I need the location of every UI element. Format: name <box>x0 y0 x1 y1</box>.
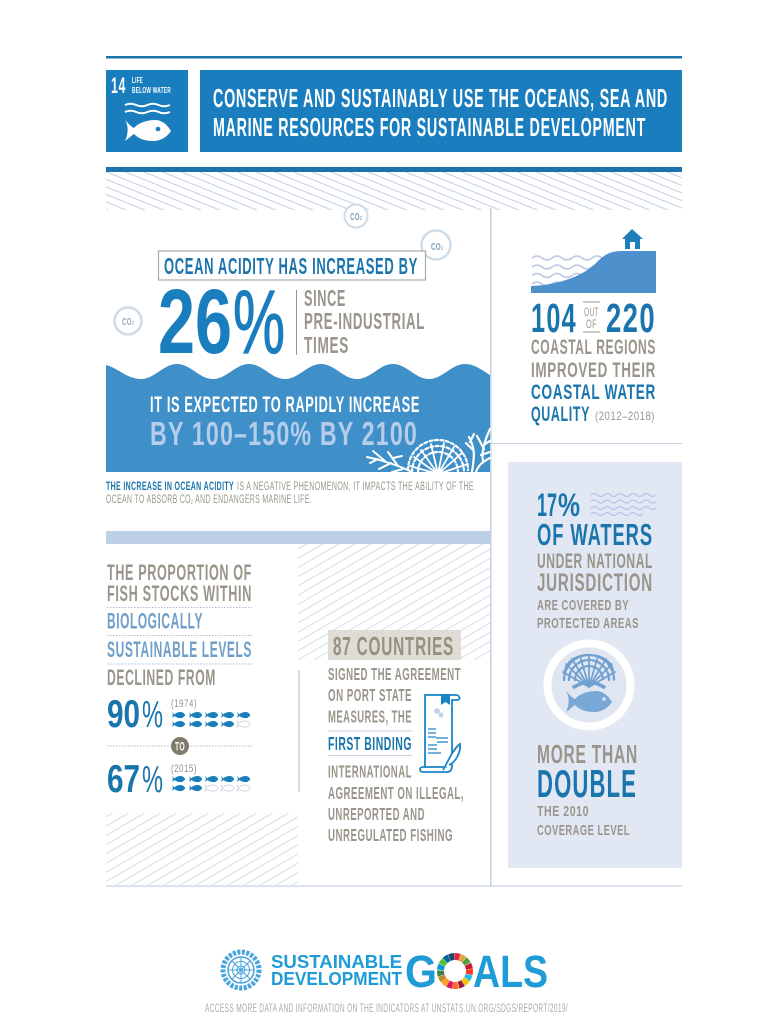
wave panel: IT IS EXPECTED TO RAPIDLY INCREASE <box>150 392 420 417</box>
26 percent stat: % <box>233 273 285 373</box>
more than double text: COVERAGE LEVEL <box>537 822 630 839</box>
coastal regions text: (2012–2018) <box>595 409 655 423</box>
protected waters text: PROTECTED AREAS <box>537 615 639 632</box>
fish stocks text: BIOLOGICALLY <box>107 608 203 634</box>
acidity explanation text: 2 <box>191 500 193 506</box>
SDG 14 icon tile <box>106 70 188 152</box>
protected waters text: JURISDICTION <box>537 569 653 597</box>
26 percent stat: 26 <box>158 271 232 373</box>
fish stocks text: THE PROPORTION OF <box>107 560 252 585</box>
fish stocks text <box>107 560 252 690</box>
87 countries label: 87 COUNTRIES <box>333 631 454 661</box>
wave panel: BY 100–150% BY 2100 <box>150 415 418 452</box>
coastal regions text: QUALITY <box>531 403 590 426</box>
port state agreement text: FIRST BINDING <box>328 733 412 754</box>
since pre-industrial text: TIMES <box>304 332 349 358</box>
67 percent stat: 67 <box>107 758 140 801</box>
since pre-industrial text <box>296 285 425 358</box>
fish pictogram 1974 <box>172 712 250 727</box>
hatch band <box>106 172 682 210</box>
more than double text <box>537 739 638 839</box>
middle vertical rule <box>298 670 300 792</box>
fish stocks text: SUSTAINABLE LEVELS <box>107 637 252 662</box>
104 out of 220 stat: 220 <box>606 295 656 341</box>
acidity explanation text: IS A NEGATIVE PHENOMENON, IT IMPACTS THE ABILITY OF THE <box>237 481 474 493</box>
104 out of 220 stat: 104 <box>531 295 577 341</box>
67 percent stat <box>107 758 197 801</box>
CO2 bubble left <box>114 308 142 334</box>
CO2 bubble top <box>344 204 368 228</box>
sustainable development wordmark: DEVELOPMENT <box>271 968 403 989</box>
thick rule <box>106 167 682 172</box>
104 out of 220 stat <box>531 295 656 341</box>
90 percent stat: % <box>142 694 163 736</box>
divider with TO <box>107 737 252 755</box>
17 percent stat: 17 <box>537 487 557 523</box>
sustainable development wordmark: SUSTAINABLE <box>271 951 402 972</box>
CO2 bubble top: CO2 <box>350 212 362 223</box>
67 percent stat: (2015) <box>171 763 197 775</box>
SDG 14 icon tile: 14 <box>111 73 126 98</box>
90 percent stat <box>107 693 197 736</box>
port state agreement text: ON PORT STATE <box>328 685 412 705</box>
more than double text: THE 2010 <box>537 803 589 820</box>
acidity explanation text: THE INCREASE IN OCEAN ACIDITY <box>106 481 234 493</box>
fish pictogram 2015 <box>172 776 250 791</box>
protected waters text <box>537 517 653 632</box>
grid lines <box>106 208 682 887</box>
87 countries label <box>328 630 461 661</box>
divider with TO: TO <box>175 740 185 754</box>
icon: coral <box>367 429 490 474</box>
fish stocks text: FISH STOCKS WITHIN <box>107 581 252 606</box>
icon: treaty scroll <box>420 694 460 772</box>
17 percent stat: % <box>558 487 580 523</box>
hatch upper middle <box>298 544 490 660</box>
fish stocks text: DECLINED FROM <box>107 665 216 690</box>
hatch lower left <box>106 813 298 885</box>
icon: coast and house <box>531 229 656 293</box>
CO2 bubble left: CO2 <box>122 317 134 328</box>
acidity explanation text: OCEAN TO ABSORB CO <box>106 494 247 506</box>
top rule <box>106 56 682 58</box>
90 percent stat: (1974) <box>171 698 197 710</box>
sustainable development wordmark <box>271 951 403 989</box>
light blue bar <box>106 531 490 544</box>
ocean acidity heading box <box>158 251 426 280</box>
acidity explanation text: AND ENDANGERS MARINE LIFE. <box>193 494 312 506</box>
SDG 14 icon tile: LIFE <box>132 76 143 85</box>
coastal regions text: COASTAL WATER <box>531 381 656 404</box>
goals wordmark with colour wheel: ALS <box>473 946 548 997</box>
90 percent stat: 90 <box>107 693 140 736</box>
title banner <box>200 70 682 152</box>
panel: protected waters <box>508 462 682 868</box>
since pre-industrial text: PRE-INDUSTRIAL <box>304 308 425 334</box>
more than double text: DOUBLE <box>537 763 637 806</box>
CO2 bubble right <box>422 230 450 260</box>
port state agreement text: MEASURES, THE <box>328 706 412 726</box>
since pre-industrial text: SINCE <box>304 285 346 311</box>
SDG 14 icon tile: BELOW WATER <box>132 86 171 95</box>
protected waters text: OF WATERS <box>537 517 653 552</box>
port state agreement text: UNREPORTED AND <box>328 804 425 824</box>
104 out of 220 stat: OF <box>586 317 597 331</box>
goals wordmark with colour wheel: G <box>405 946 437 997</box>
port state agreement text: INTERNATIONAL <box>328 762 412 782</box>
67 percent stat: % <box>142 759 163 801</box>
icon: waves <box>591 494 656 516</box>
port state agreement text: SIGNED THE AGREEMENT <box>328 664 461 684</box>
coastal regions text: IMPROVED THEIR <box>531 359 656 382</box>
UN emblem <box>223 952 259 988</box>
port state agreement text <box>328 664 464 845</box>
goals wordmark with colour wheel <box>405 946 548 997</box>
icon: coral and fish in ring <box>548 644 630 726</box>
coastal regions text: COASTAL REGIONS <box>531 336 656 359</box>
protected waters text: ARE COVERED BY <box>537 597 629 614</box>
protected waters text: UNDER NATIONAL <box>537 550 653 573</box>
coastal regions text <box>531 336 656 426</box>
CO2 bubble right: CO2 <box>431 242 443 253</box>
port state agreement text: UNREGULATED FISHING <box>328 825 453 845</box>
wave panel <box>106 364 490 474</box>
port state agreement text: AGREEMENT ON ILLEGAL, <box>328 783 464 803</box>
104 out of 220 stat: OUT <box>584 305 599 319</box>
acidity explanation text <box>106 481 474 506</box>
ocean acidity heading box: OCEAN ACIDITY HAS INCREASED BY <box>164 253 418 279</box>
more than double text: MORE THAN <box>537 739 638 769</box>
